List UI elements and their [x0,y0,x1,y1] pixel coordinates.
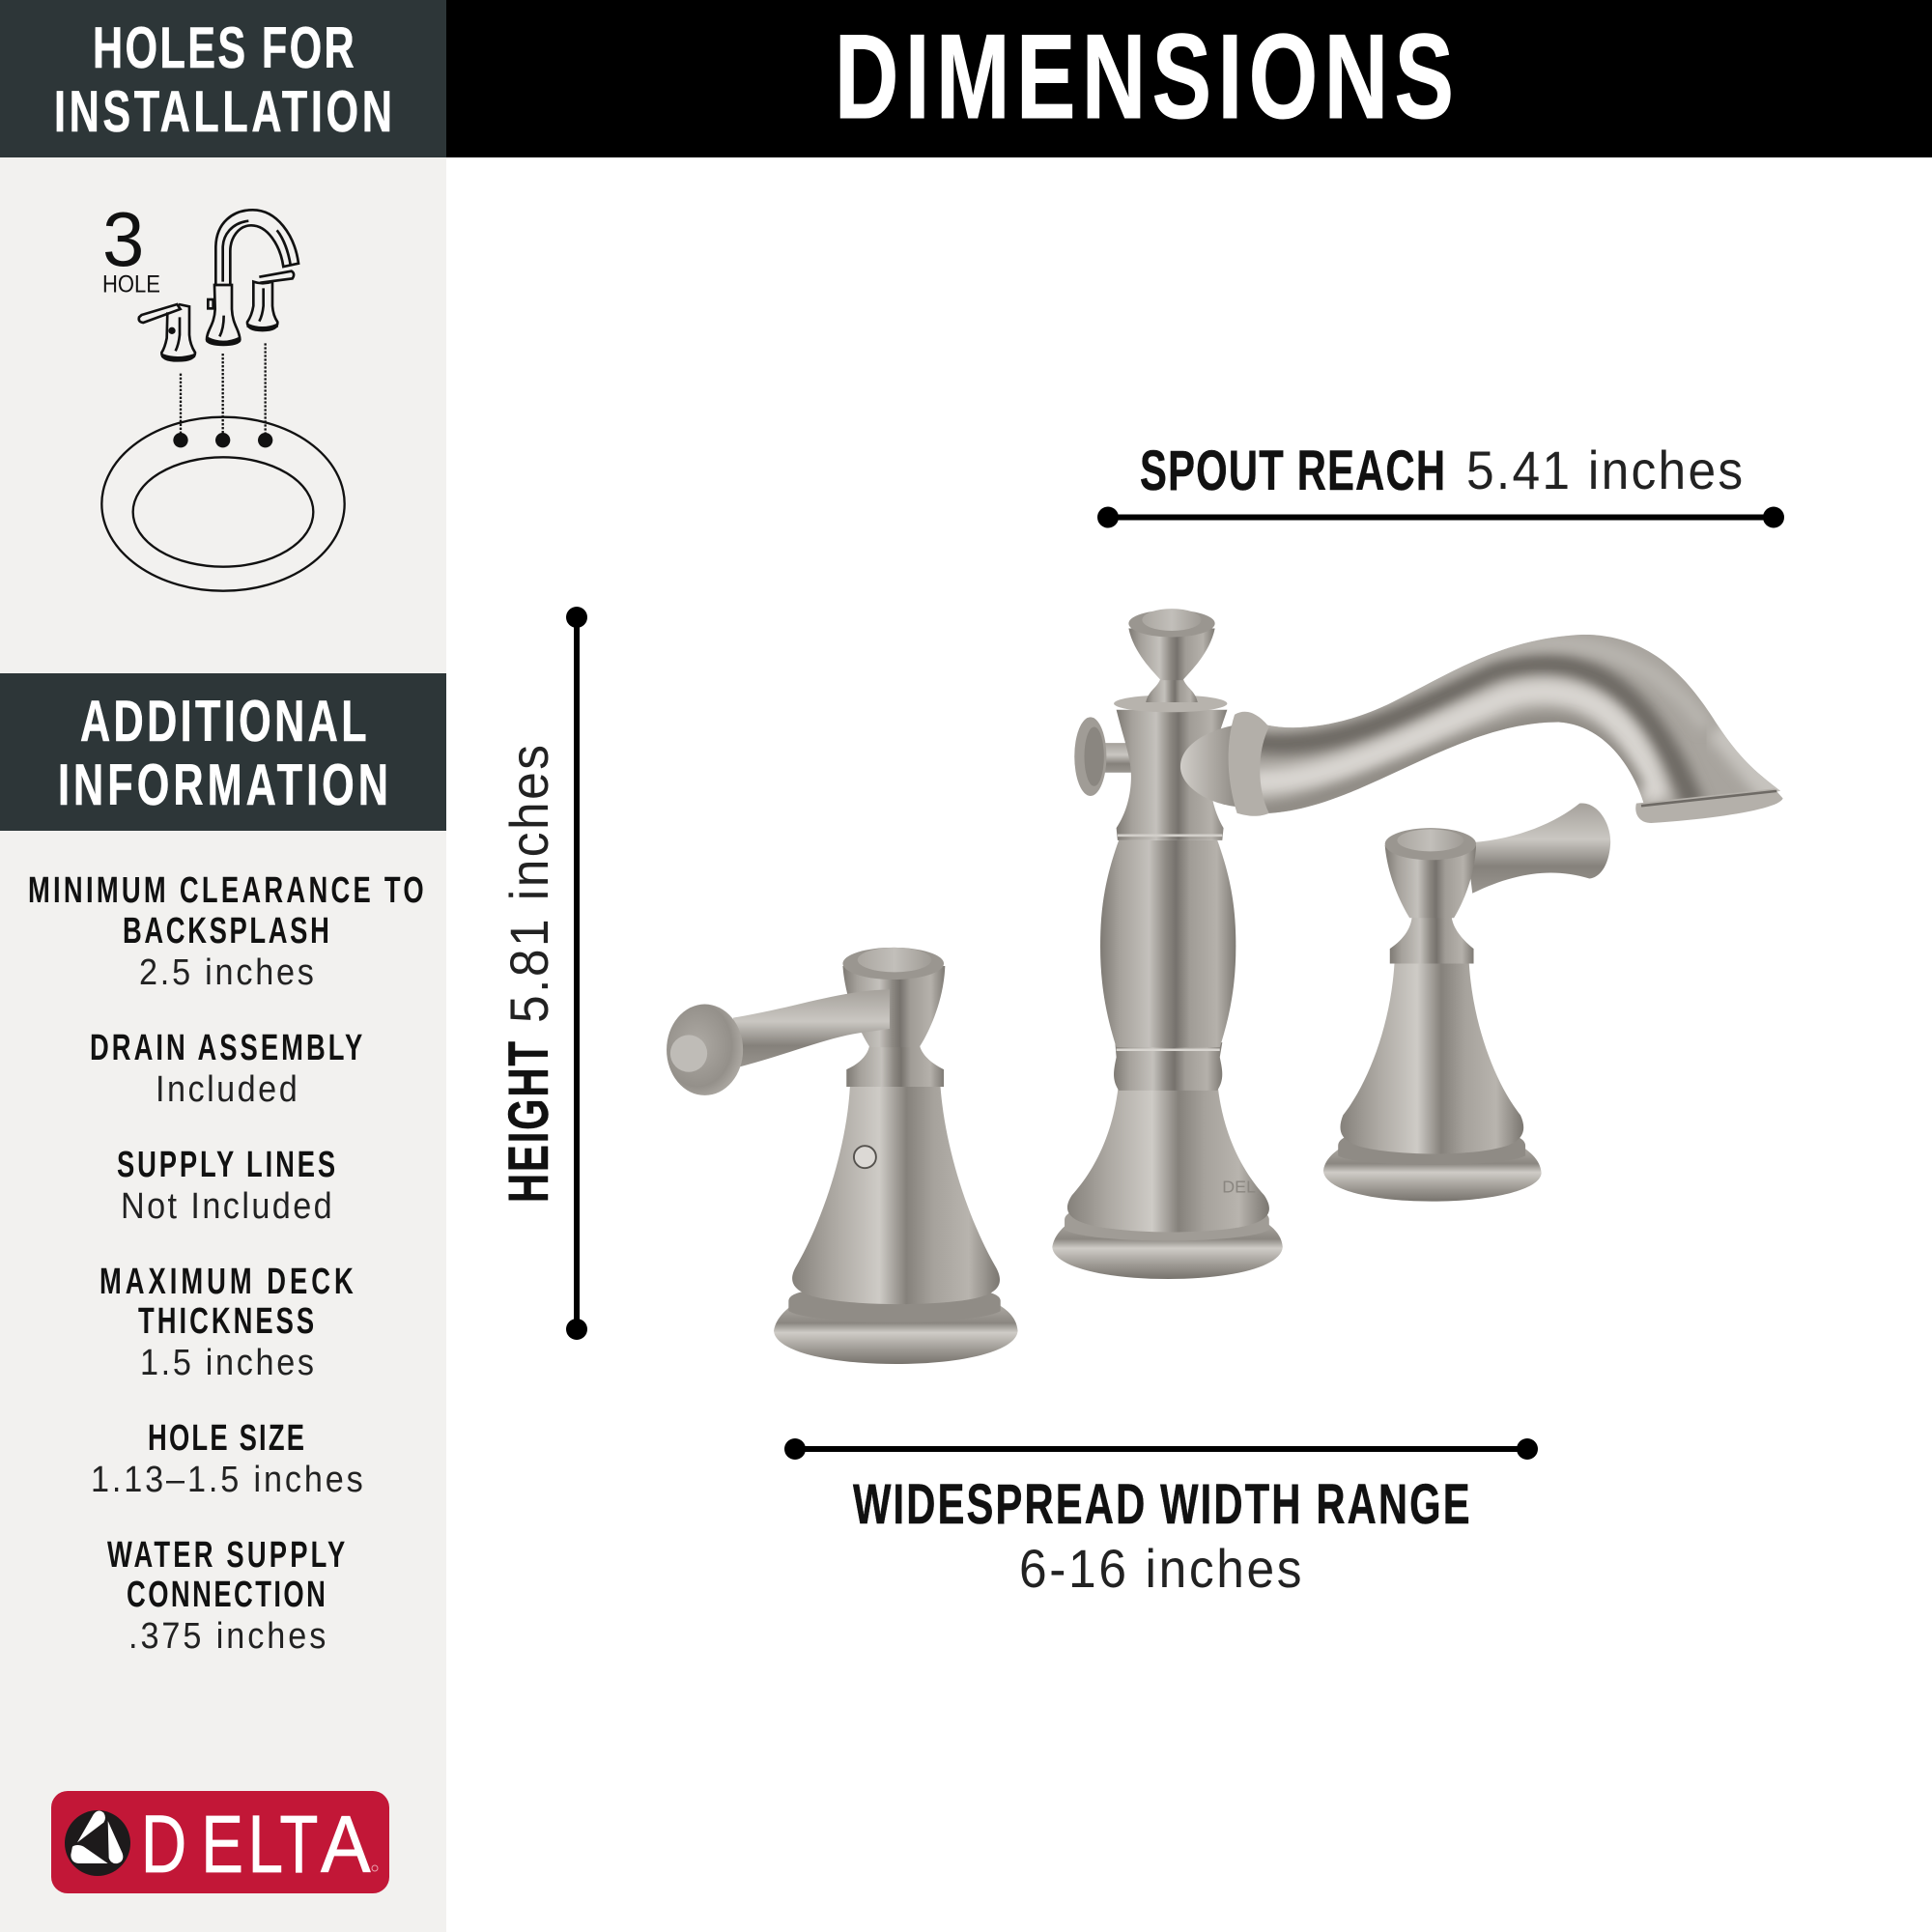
spec: maximum deck thickness: MAXIMUM DECK [99,1262,354,1302]
dimension: widespread width range label [853,1472,1470,1599]
icon: sink basin [101,417,345,591]
spec: drain assembly: DRAIN ASSEMBLY [90,1028,362,1068]
spec: water supply connection [107,1535,345,1656]
title: dimensions [446,0,1932,157]
spec: hole size: HOLE SIZE [148,1418,304,1459]
dimension: widespread width range label: 6-16 inches [1019,1539,1302,1599]
dimension: spout reach label [1140,439,1743,502]
product: centre body [1052,609,1283,1279]
header: additional information: INFORMATION [58,753,388,818]
dimension: spout reach label: 5.41 inches [1466,440,1743,500]
dimension: height label: 5.81 inches [499,745,559,1023]
header: additional information [0,673,446,831]
icon: three holes [173,433,272,447]
spec: hole size: 1.13–1.5 inches [91,1458,363,1499]
spec: minimum clearance to backsplash [28,870,424,992]
product: right handle [1323,803,1610,1202]
title: dimensions: DIMENSIONS [835,11,1454,144]
arrow: height measure line [566,607,587,1340]
icon: centre spout [207,210,298,345]
spec: water supply connection: .375 inches [128,1614,326,1656]
product: spout [1180,635,1783,823]
product: centre body: DEL [1222,1178,1256,1197]
panel: sidebar background [0,157,446,1932]
label: 3 hole [102,196,160,298]
dimension: height label [497,745,560,1203]
spec: minimum clearance to backsplash: BACKSPLASH [123,911,329,952]
icon: right handle [247,271,294,330]
spec: supply lines: Not Included [121,1184,332,1226]
dimension: height label: HEIGHT [497,1041,560,1203]
spec: water supply connection: CONNECTION [127,1575,326,1615]
header: holes for installation [0,0,446,157]
label: 3 hole: HOLE [102,271,160,298]
logo: delta: A [321,1800,371,1890]
header: additional information: ADDITIONAL [80,690,367,754]
dimension: spout reach label: SPOUT REACH [1140,439,1445,502]
arrow: width measure line [784,1438,1538,1460]
spec: maximum deck thickness [99,1262,354,1382]
icon: left handle [139,304,195,360]
label: 3 hole: 3 [102,196,144,282]
spec: minimum clearance to backsplash: MINIMUM CLEARANCE TO [28,870,424,911]
spec: water supply connection: WATER SUPPLY [107,1535,345,1576]
arrow: spout reach measure line [1097,506,1784,527]
spec: supply lines [117,1145,335,1226]
dimension: widespread width range label: WIDESPREAD WIDTH RANGE [853,1472,1470,1536]
spec: drain assembly: Included [156,1067,298,1109]
logo: delta: DELT [141,1799,318,1889]
spec: minimum clearance to backsplash: 2.5 inches [139,951,314,992]
spec: supply lines: SUPPLY LINES [117,1145,335,1185]
logo: delta [51,1791,389,1893]
header: holes for installation: INSTALLATION [54,80,392,145]
product: left handle [667,948,1018,1364]
spec: drain assembly [90,1028,362,1109]
header: holes for installation: HOLES FOR [93,16,355,81]
icon: 3 hole installation diagram [101,196,345,591]
spec: maximum deck thickness: THICKNESS [138,1301,314,1342]
product: faucet set [667,609,1799,1364]
spec: hole size [91,1418,363,1499]
spec: maximum deck thickness: 1.5 inches [140,1341,314,1382]
icon: dotted guide lines [181,343,266,435]
